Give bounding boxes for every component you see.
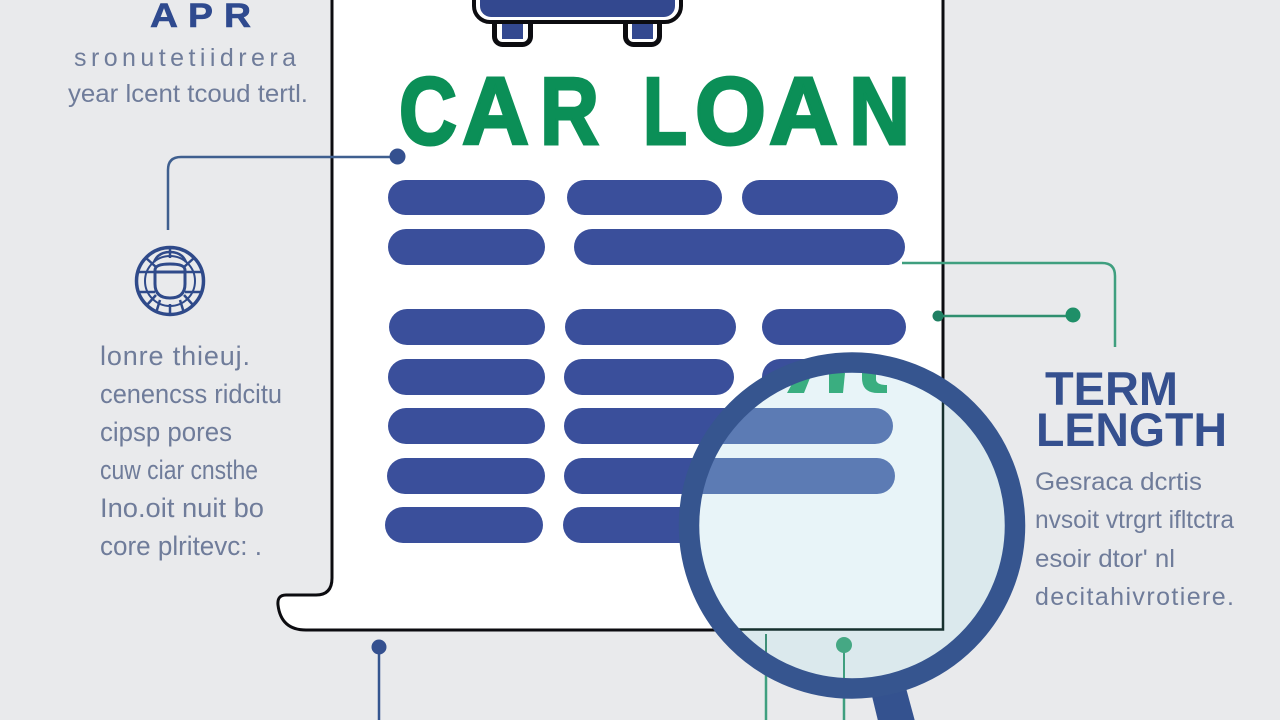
text block: term length description: Gesraca dcrtis	[1035, 468, 1202, 496]
text block: term length description	[1035, 468, 1234, 611]
text block: term length description: nvsoit vtrgrt ifltctra	[1035, 506, 1234, 534]
text block: left description	[100, 341, 282, 561]
text block: left description: cenencss ridcitu	[100, 379, 282, 409]
bottom green pin line below lens	[843, 695, 845, 720]
title: car loan: N	[849, 58, 910, 165]
title: car loan: A	[462, 58, 529, 165]
title: car loan: R	[540, 58, 599, 165]
connector: green dots	[932, 308, 1080, 322]
text block: left description: cipsp pores	[100, 417, 232, 447]
text block: term length description: decitahivrotiere.	[1035, 583, 1234, 611]
heading: term length: TERM	[1045, 362, 1178, 415]
title: car loan: C	[399, 58, 457, 165]
connector: bar to term length	[902, 263, 1115, 347]
document text bars	[385, 180, 906, 543]
icon: globe badge	[136, 248, 204, 314]
text block: left description: Ino.oit nuit bo	[100, 493, 264, 523]
text block: left description: lonre thieuj.	[100, 341, 250, 371]
title: car loan: O	[695, 58, 766, 165]
magnifying glass lens	[699, 372, 1004, 678]
text block: term length description: esoir dtor' nl	[1035, 545, 1175, 573]
magnifying glass ring	[689, 362, 1015, 688]
text block: apr description: sronutetiidrera	[74, 44, 296, 72]
magnified bars	[702, 408, 895, 494]
magnifying glass handle	[871, 688, 916, 720]
document edge through lens	[738, 402, 944, 631]
title: car loan: A	[769, 58, 838, 165]
text block: apr description: year lcent tcoud tertl.	[68, 80, 308, 108]
text block: left description: cuw ciar cnsthe	[100, 455, 258, 485]
heading: term length	[1036, 362, 1227, 456]
title: car loan: L	[643, 58, 687, 165]
icon: car	[474, 0, 681, 44]
text block: apr description	[68, 44, 308, 108]
panel: loan document	[278, 0, 943, 630]
connector: bottom green line	[765, 634, 767, 720]
heading: term length: LENGTH	[1036, 403, 1227, 456]
text block: left description: core plritevc: .	[100, 531, 262, 561]
pin and line through lens	[765, 634, 852, 678]
connector: apr to document	[168, 148, 406, 230]
magnified green letters	[787, 373, 887, 393]
connector: bottom left pin	[372, 640, 386, 720]
